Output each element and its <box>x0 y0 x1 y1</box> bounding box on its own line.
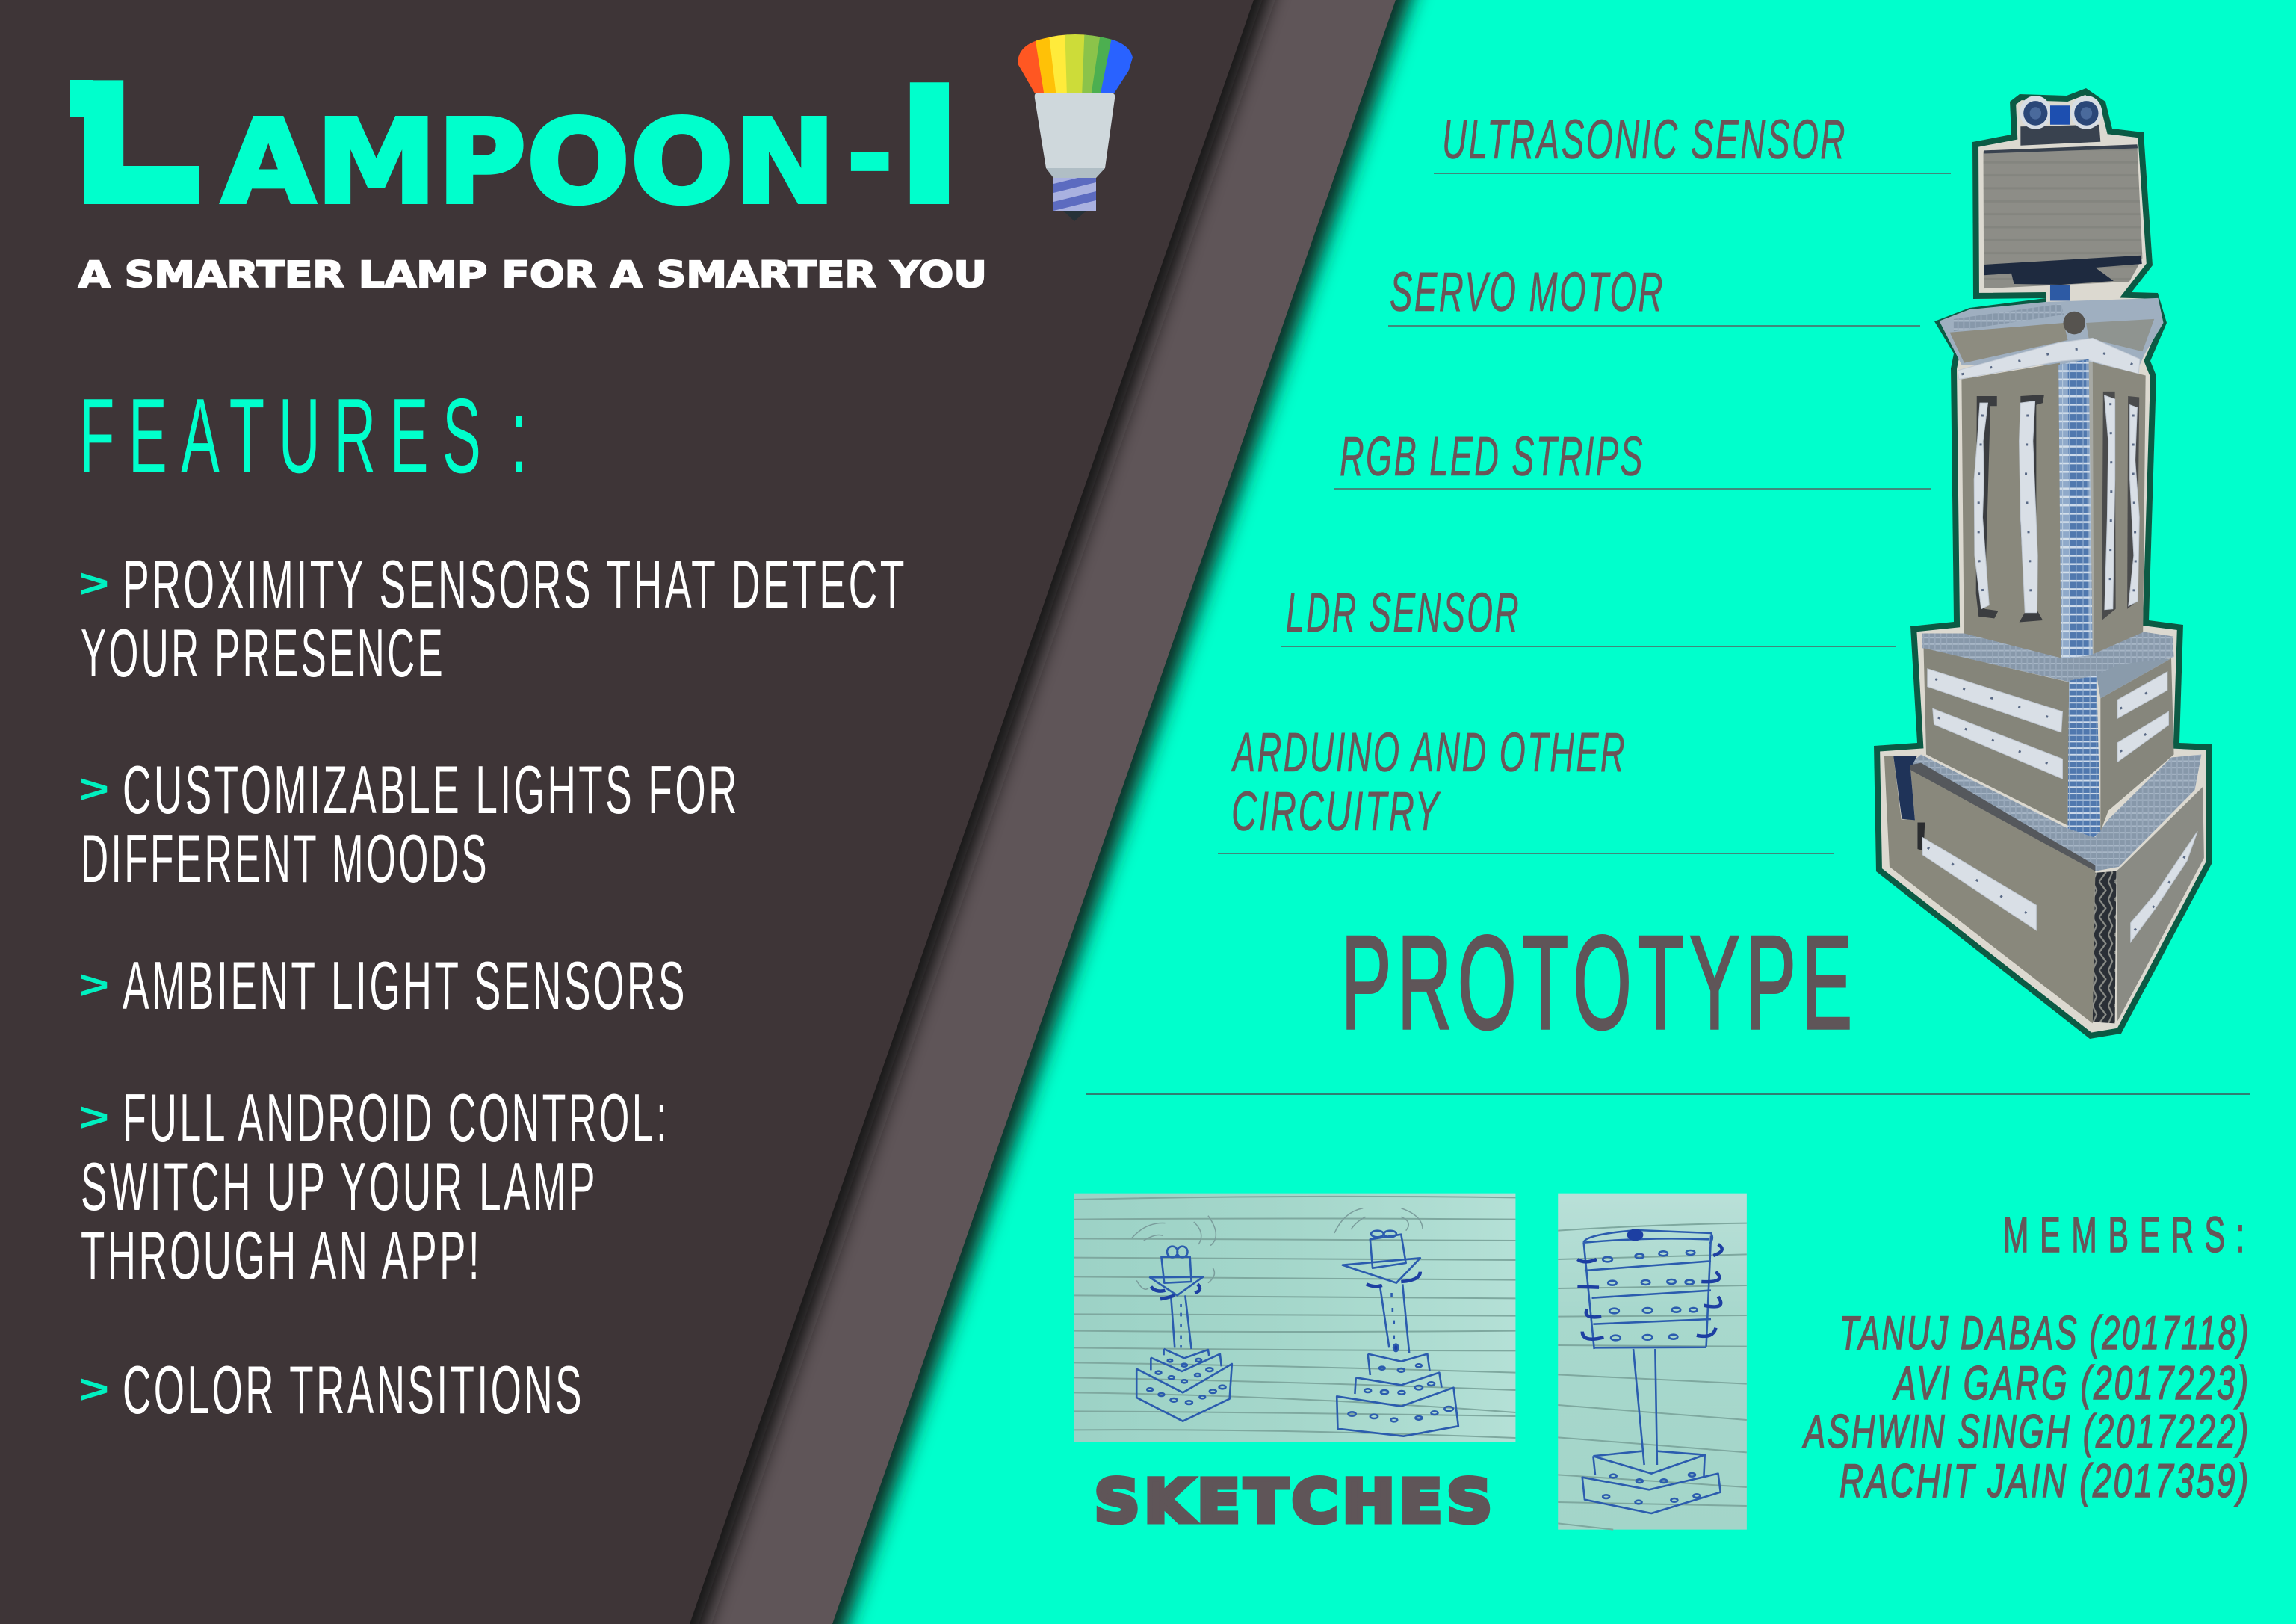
feature: ambient light sensors: > <box>79 963 109 1007</box>
middle tier LED strips <box>1928 669 2169 779</box>
left lamp sketch <box>1132 1216 1232 1421</box>
label: servo motor: SERVO MOTOR <box>1390 261 1665 323</box>
feature: android control: THROUGH AN APP! <box>81 1218 482 1294</box>
right lamp sketch <box>1334 1208 1458 1436</box>
top box <box>1984 144 2142 300</box>
divider line <box>1086 1093 2250 1095</box>
tower faces <box>1961 363 2061 658</box>
ruled lines <box>1074 1197 1515 1438</box>
title: Lampoon-I: I <box>896 52 963 240</box>
base tape <box>1893 756 1917 820</box>
heading: features: FEATURES : <box>79 377 541 495</box>
feature: proximity sensors <box>79 547 907 691</box>
dark left panel <box>0 0 1254 1624</box>
sketch photos <box>1074 1194 1747 1530</box>
title: Lampoon-I: AMPOON <box>221 94 836 230</box>
label: arduino and other circuitry: CIRCUITRY <box>1231 780 1441 842</box>
title: Lampoon-I: L <box>75 55 174 236</box>
feature: android control: SWITCH UP YOUR LAMP <box>81 1149 598 1225</box>
tower LED strips <box>1974 392 2139 623</box>
team members <box>1801 1207 2256 1507</box>
sensor head <box>2020 96 2102 146</box>
base corrugated corner <box>2093 871 2116 1023</box>
label: ldr sensor: LDR SENSOR <box>1286 581 1520 643</box>
feature: customizable lights: > <box>79 767 109 812</box>
label: arduino and other circuitry: ARDUINO AND OTHER <box>1231 721 1627 783</box>
upper lamp parts <box>1940 96 2164 658</box>
shadow of grey diagonal band <box>672 0 1426 1624</box>
feature: customizable lights: DIFFERENT MOODS <box>81 821 489 897</box>
ruled lines <box>1558 1223 1747 1530</box>
title: Lampoon-I <box>70 52 963 240</box>
sketch photo: two lamp drawings <box>1074 1194 1515 1442</box>
subtitle: A SMARTER LAMP FOR A SMARTER YOU <box>78 254 987 296</box>
shadow of dark panel <box>0 0 1284 1624</box>
feature: ambient light sensors: AMBIENT LIGHT SENSORS <box>123 948 687 1024</box>
title: Lampoon-I: - <box>846 87 894 223</box>
feature: customizable lights <box>79 753 740 897</box>
feature: color transitions: > <box>79 1367 109 1412</box>
grey diagonal band <box>672 0 1396 1624</box>
base left face <box>1884 756 2095 1023</box>
heading: prototype: PROTOTYPE <box>1341 908 1858 1057</box>
lamp outline sticker <box>1874 88 2212 1039</box>
middle tier <box>1922 632 2174 837</box>
features list <box>79 547 907 1428</box>
feature: android control: > <box>79 1095 109 1140</box>
heading: sketches: SKETCHES <box>1095 1469 1497 1536</box>
feature: ambient light sensors <box>79 948 687 1024</box>
lamp drawing <box>1582 1230 1721 1513</box>
feature: color transitions: COLOR TRANSITIONS <box>123 1353 584 1428</box>
label: arduino and other circuitry <box>1218 721 1834 853</box>
label: rgb led strips: RGB LED STRIPS <box>1340 425 1644 487</box>
feature: android control <box>79 1081 669 1294</box>
feature: proximity sensors: PROXIMITY SENSORS THAT DETECT <box>123 547 907 623</box>
cap <box>1940 298 2164 380</box>
base LED strips <box>1917 823 2197 942</box>
corrugated edge <box>1910 763 2095 871</box>
photo: cardboard lamp prototype <box>1874 88 2212 1039</box>
icon: rainbow light bulb <box>1018 34 1133 221</box>
lower lamp parts <box>1884 632 2204 1023</box>
base right face <box>2116 787 2204 1021</box>
feature: proximity sensors: > <box>79 561 109 606</box>
feature: customizable lights: CUSTOMIZABLE LIGHTS FOR <box>123 753 740 828</box>
label: ultrasonic sensor: ULTRASONIC SENSOR <box>1442 108 1847 170</box>
feature: proximity sensors: YOUR PRESENCE <box>81 616 445 691</box>
feature: android control: FULL ANDROID CONTROL: <box>123 1081 669 1156</box>
sketch photo: single lamp drawing <box>1558 1194 1747 1530</box>
feature: color transitions <box>79 1353 584 1428</box>
base top <box>1910 755 2201 871</box>
component labels <box>1218 108 1951 853</box>
